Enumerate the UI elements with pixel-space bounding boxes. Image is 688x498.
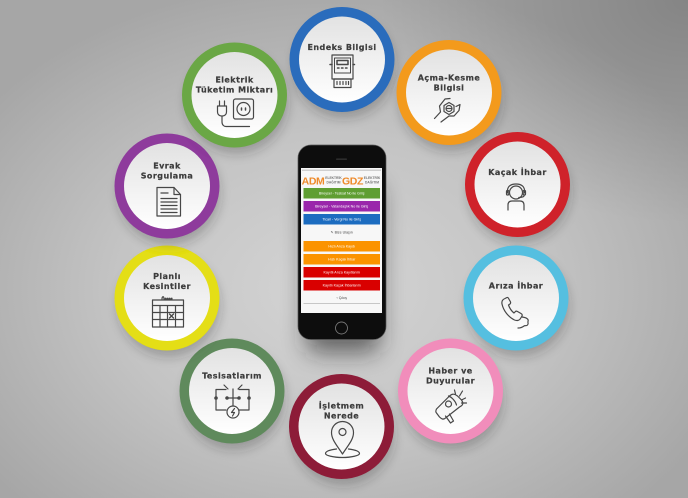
ring [180, 338, 284, 444]
panel: Tesisatlarım [180, 338, 284, 449]
panel: Evrak Sorgulama [114, 134, 220, 244]
heading [418, 73, 480, 92]
button: kaçak ihbarları: Kayıtlı Kaçak İhbarlarım [323, 282, 361, 288]
icon: electric meter [330, 55, 354, 88]
button: ticari [304, 214, 380, 224]
panel: Açma-Kesme Bilgisi [396, 40, 502, 150]
heading: Sorgulama [141, 172, 193, 181]
ring [464, 246, 568, 350]
heading: Açma-Kesme [418, 73, 480, 82]
logos: DAĞITIM [365, 180, 379, 184]
phone shadow [306, 185, 380, 353]
heading [426, 367, 475, 386]
icon: wrench and nut [434, 98, 460, 122]
icon: megaphone [436, 390, 466, 423]
phone speaker [336, 158, 347, 160]
ring [465, 132, 570, 237]
heading: Bilgisi [434, 83, 464, 92]
inner disc [406, 50, 492, 136]
shadow [294, 384, 394, 484]
heading: İşletmem [319, 401, 364, 411]
panel: Haber ve Duyurular [398, 338, 503, 449]
logos: ELEKTRİK [325, 176, 342, 180]
button: arıza kayıtları [304, 267, 380, 278]
button: hızlı arıza: Hızlı Arıza Kaydı [328, 244, 355, 248]
ring [398, 338, 503, 444]
heading [196, 75, 273, 94]
heading: Tesisatlarım [202, 372, 262, 381]
panel: Endeks Bilgisi [290, 7, 394, 118]
panel: Planlı Kesintiler [114, 246, 220, 356]
icon: location pin [326, 422, 360, 458]
screen footer line [304, 302, 380, 305]
shadow [470, 142, 570, 242]
heading: Duyurular [426, 377, 475, 386]
button: arıza kayıtları: Kayıtlı Arıza Kayıtlarım [324, 270, 360, 274]
link: bize ulaşın: ✎ Bize Ulaşın [331, 230, 353, 234]
button: hızlı kaçak: Hızlı Kaçak İhbar [328, 256, 356, 262]
inner disc [299, 16, 385, 102]
ring [396, 40, 502, 145]
phone body [298, 145, 386, 340]
logos: GDZ [342, 176, 364, 188]
heading: Tüketim Miktarı [196, 85, 273, 94]
heading: Endeks Bilgisi [307, 43, 377, 52]
heading: Kesintiler [143, 282, 191, 291]
inner disc [474, 142, 560, 228]
heading [143, 272, 191, 291]
shadow [401, 50, 501, 150]
heading: Kaçak İhbar [488, 167, 547, 177]
shadow [186, 53, 286, 153]
icon: plug and socket [218, 99, 254, 126]
status bar [302, 170, 381, 171]
phone [298, 145, 386, 340]
logos: DAĞITIM [327, 180, 341, 184]
inner disc [408, 348, 494, 434]
panel: Kaçak İhbar [465, 132, 570, 242]
heading: Arıza İhbar [489, 280, 543, 290]
panel: İşletmem Nerede [289, 374, 394, 484]
icon: calendar [152, 297, 184, 327]
heading: Planlı [153, 272, 181, 281]
home button [336, 322, 348, 334]
heading: Haber ve [428, 367, 473, 376]
button: bireysel tesisat [304, 188, 380, 198]
icon: document [157, 188, 180, 216]
logos: ELEKTRİK [364, 176, 381, 180]
button: bireysel vatandaşlık: Bireysel - Vatandaşlık No ile Giriş [315, 204, 368, 208]
shadow [119, 144, 219, 244]
inner disc [192, 52, 278, 138]
inner disc [189, 348, 275, 434]
panel: Elektrik Tüketim Miktarı [182, 42, 287, 153]
inner disc [473, 255, 559, 341]
inner disc [298, 384, 384, 470]
shadow [468, 256, 568, 356]
heading: Elektrik [215, 75, 254, 84]
button: bireysel vatandaşlık [304, 201, 380, 212]
ring [114, 134, 220, 238]
shadow [184, 349, 284, 449]
ring [182, 42, 287, 148]
inner disc [124, 143, 210, 229]
ring [290, 7, 394, 112]
icon: circuit diagram [215, 385, 250, 418]
panel: Arıza İhbar [464, 246, 568, 356]
phone screen [301, 168, 382, 313]
button: bireysel tesisat: Bireysel - Tesisat No ile Giriş [319, 192, 365, 196]
heading: Evrak [153, 162, 181, 171]
inner disc [124, 255, 210, 341]
link: çıkış: ‹ Çıkış [337, 296, 347, 300]
shadow [119, 256, 219, 356]
ring [114, 246, 220, 350]
button: kaçak ihbarları [304, 280, 380, 290]
button: ticari: Ticari - Vergi No ile Giriş [322, 218, 361, 222]
heading [319, 401, 364, 421]
icon: headset operator [506, 184, 526, 210]
heading [141, 162, 193, 181]
logos [302, 176, 381, 188]
shadow [294, 18, 394, 118]
ring [289, 374, 394, 479]
button: hızlı kaçak [304, 254, 380, 264]
button: hızlı arıza [304, 241, 380, 252]
heading: Nerede [324, 412, 359, 421]
icon: telephone handset [502, 297, 528, 328]
logos: ADM [302, 176, 325, 188]
shadow [402, 349, 502, 449]
